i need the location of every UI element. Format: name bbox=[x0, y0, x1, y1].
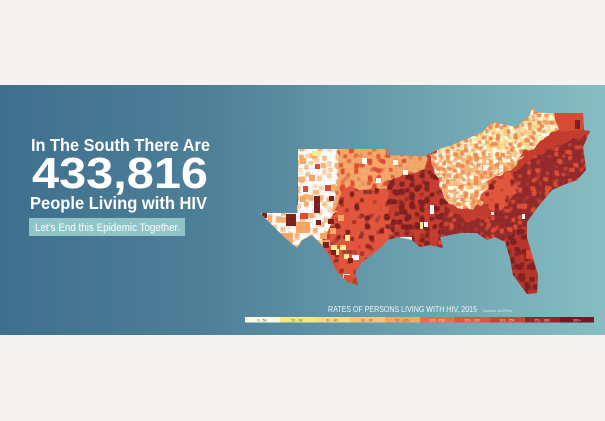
county cells: maroon bbox=[262, 117, 580, 263]
legend colour scale: 251 - 300 bbox=[534, 318, 550, 322]
legend colour scale: 301+ bbox=[573, 318, 581, 322]
legend colour scale: 61 - 80 bbox=[326, 318, 338, 322]
county cells: red bbox=[300, 164, 533, 282]
legend colour scale: 0 - 50 bbox=[257, 318, 267, 322]
panel: gradient banner bbox=[0, 85, 605, 335]
legend colour scale: 81 - 90 bbox=[361, 318, 373, 322]
legend colour scale: 191 - 250 bbox=[499, 318, 515, 322]
legend colour scale: 121 - 150 bbox=[429, 318, 445, 322]
choropleth map of the southern US bbox=[255, 102, 600, 300]
county borders bbox=[264, 108, 590, 294]
legend title: RATES OF PERSONS LIVING WITH HIV, 2015 bbox=[328, 304, 477, 314]
heading: In The South There Are: In The South There Are bbox=[31, 135, 210, 155]
callout: Let's End this Epidemic Together bbox=[29, 218, 185, 236]
legend source: Source: AIDSVu bbox=[483, 308, 512, 313]
legend colour scale: 151 - 190 bbox=[464, 318, 480, 322]
big number: 433,816: 433,816 bbox=[32, 149, 208, 198]
heading: People Living with HIV: People Living with HIV bbox=[30, 193, 207, 213]
legend colour scale: 91 - 120 bbox=[395, 318, 409, 322]
callout: Let's End this Epidemic Together: Let’s End this Epidemic Together. bbox=[35, 222, 180, 234]
legend colour scale: 51 - 60 bbox=[291, 318, 303, 322]
county cells: orange bbox=[281, 158, 344, 246]
county cells: white bbox=[343, 158, 525, 281]
county cells: yellow bbox=[312, 151, 423, 259]
infographic bbox=[0, 85, 605, 335]
legend colour scale bbox=[245, 317, 594, 322]
